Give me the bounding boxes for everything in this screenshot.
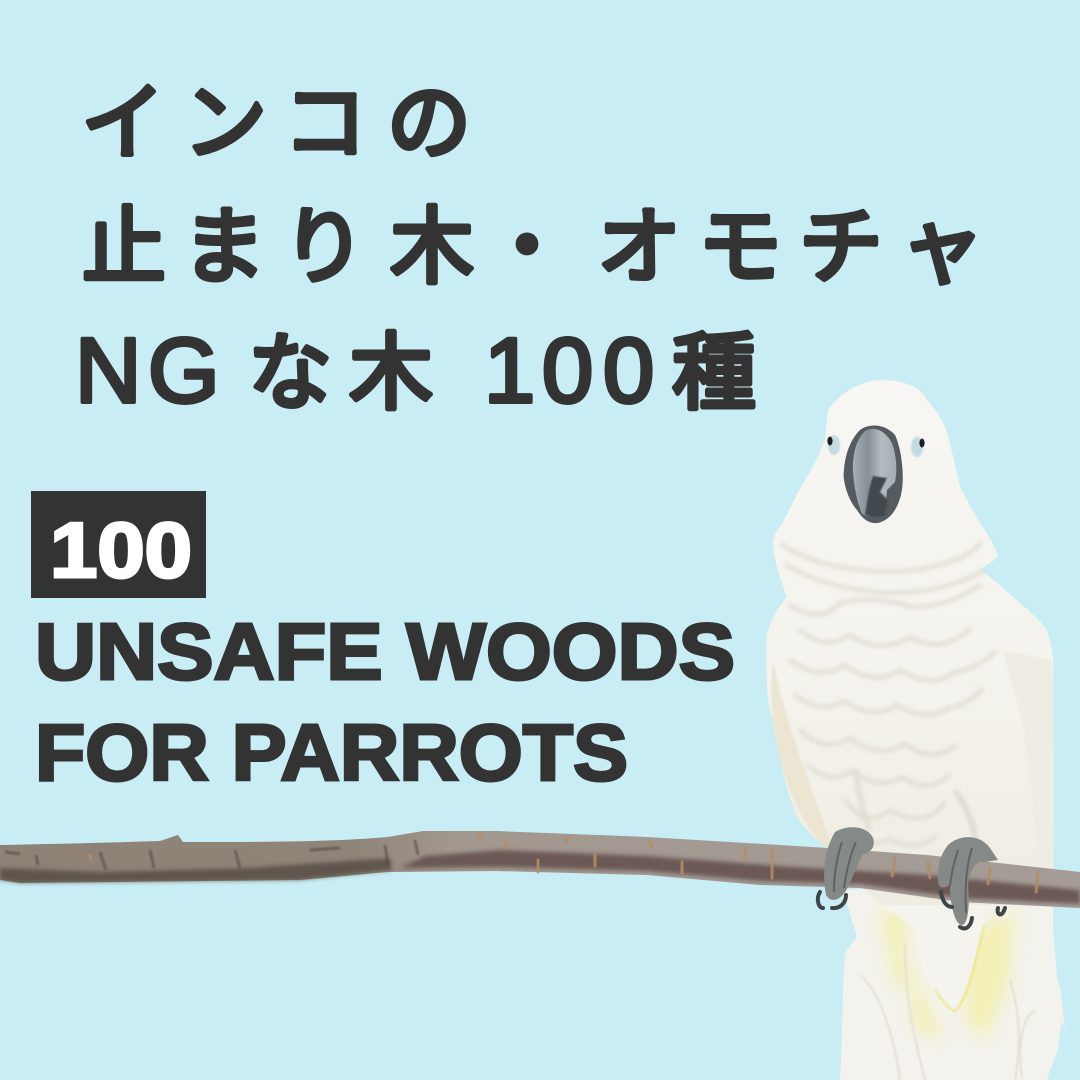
leg shadows — [955, 790, 975, 840]
right foot — [938, 837, 998, 925]
branch lower shadow right — [400, 850, 1080, 904]
branch texture — [5, 840, 418, 870]
Japanese title: インコの — [81, 76, 471, 170]
English heading: UNSAFE WOODS — [35, 607, 735, 696]
claws — [818, 892, 1005, 928]
parrot eyes — [828, 435, 840, 455]
badge: 100 — [31, 491, 206, 598]
illustration: parrot tail — [840, 880, 1065, 1080]
left wing cream edge — [771, 660, 832, 852]
badge: 100: 100 — [50, 506, 192, 594]
tail feather lines — [860, 945, 1035, 1080]
parrot beak — [844, 426, 903, 523]
toe lines — [834, 842, 972, 913]
Japanese title: 種 — [672, 326, 756, 420]
parrot silhouette — [766, 380, 1053, 905]
illustration: parrot body — [766, 380, 1054, 905]
Japanese title: 100 — [484, 320, 654, 422]
left foot — [824, 827, 874, 900]
branch lower shadow left — [0, 858, 392, 883]
Japanese title: 止まり木・オモチャ — [82, 200, 984, 294]
Japanese title — [75, 76, 984, 422]
Japanese title: NG — [75, 320, 220, 422]
undertail feather — [870, 890, 985, 1010]
Japanese title: な木 — [248, 326, 433, 420]
tail yellow tint — [880, 910, 1015, 1040]
illustration: branch — [0, 831, 1080, 908]
English heading — [35, 607, 735, 797]
branch buds — [90, 834, 1038, 892]
illustration: parrot feet — [818, 827, 1005, 928]
chest feather scallops — [782, 543, 995, 846]
right wing feather — [1003, 650, 1054, 880]
English heading: FOR PARROTS — [35, 708, 628, 797]
